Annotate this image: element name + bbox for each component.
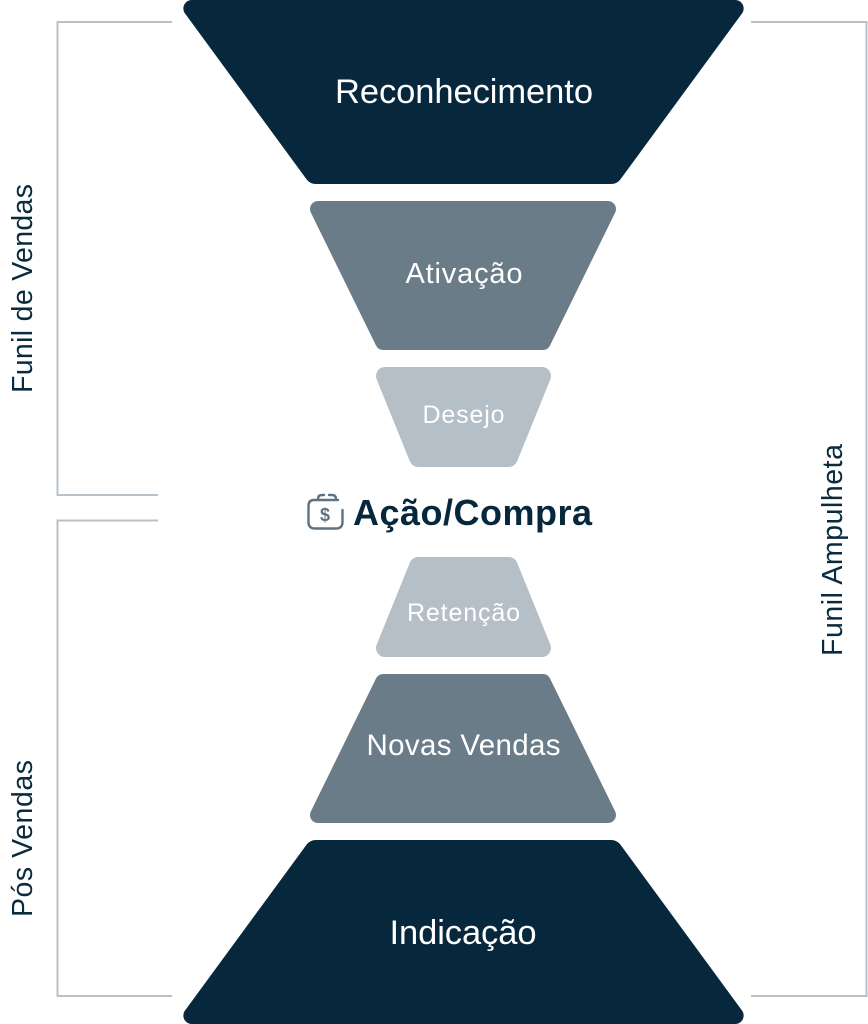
funnel stage: Indicação [183,840,744,1024]
bracket: Pós Vendas [58,520,172,996]
funnel stage: Indicação: Indicação [390,914,536,952]
funnel stage: Reconhecimento: Reconhecimento [335,73,593,111]
heading: Ação/Compra: Ação/Compra [353,492,593,533]
label: Funil Ampulheta: Funil Ampulheta [817,444,849,656]
label: Funil de Vendas: Funil de Vendas [7,184,39,393]
label: Pós Vendas: Pós Vendas [7,760,39,917]
funnel stage: Desejo: Desejo [422,401,504,429]
funnel stage: Novas Vendas: Novas Vendas [366,729,560,762]
funnel stage: Desejo [376,367,551,467]
bracket: Funil Ampulheta [751,22,866,996]
funnel stage: Reconhecimento [183,0,744,184]
funnel stage: Retenção [376,557,551,657]
bracket: Funil de Vendas [58,22,172,495]
funnel stage: Ativação: Ativação [406,258,522,290]
icon: money bag [308,495,342,528]
icon: money bag: $ [320,505,330,525]
funnel stage: Ativação [310,201,616,350]
funnel stage: Novas Vendas [310,674,616,823]
funnel stage: Retenção: Retenção [407,599,520,627]
